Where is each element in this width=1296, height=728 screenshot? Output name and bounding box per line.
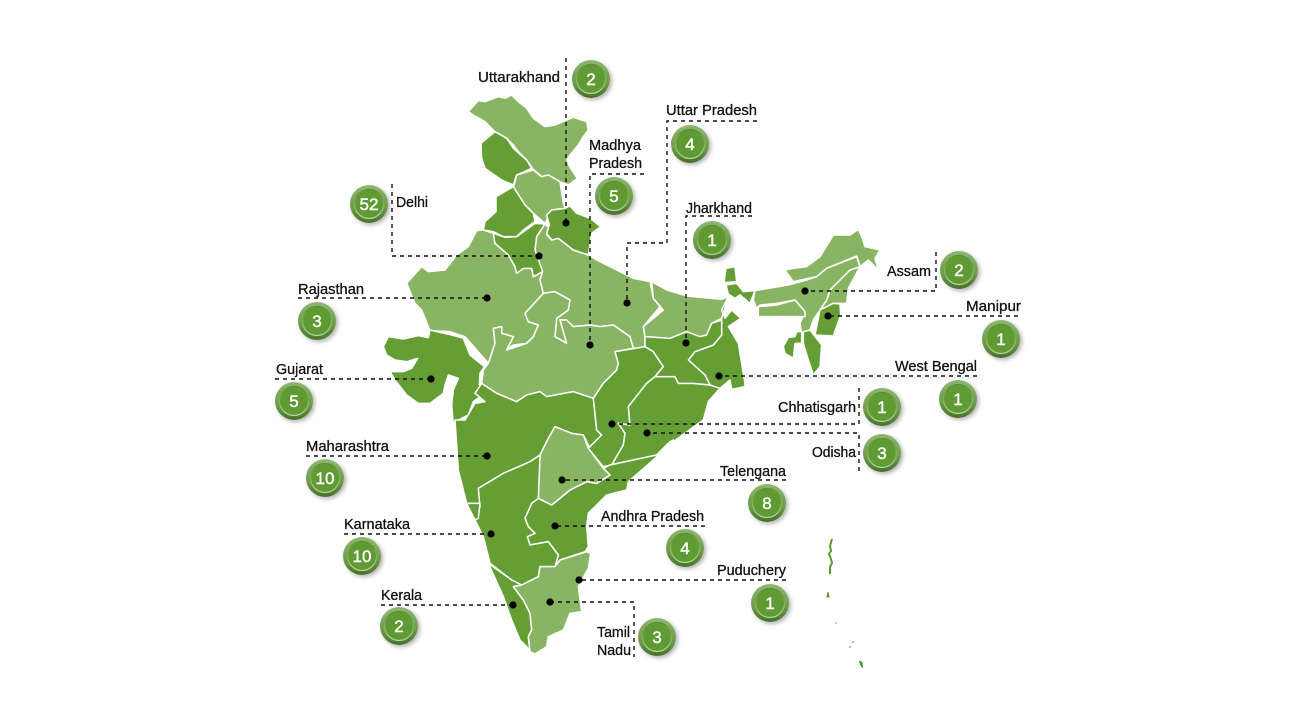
callout: West Bengal: West Bengal <box>895 358 977 375</box>
Maharashtra <box>455 383 602 503</box>
Manipur <box>815 303 841 336</box>
callout: Jharkhand: 1 <box>707 231 717 250</box>
callout: Assam <box>801 251 978 295</box>
north Bengal strip <box>726 283 755 303</box>
callout: Assam: Assam <box>887 263 931 280</box>
callout: Odisha <box>643 429 901 472</box>
callout: Delhi <box>350 184 543 260</box>
callout: Tamil Nadu: Nadu <box>597 642 631 659</box>
callout: Rajasthan <box>298 281 491 340</box>
Ladakh and Kashmir <box>468 95 588 185</box>
callout: Madhya Pradesh: Madhya <box>589 137 642 154</box>
Sikkim <box>724 267 737 283</box>
callout: West Bengal <box>715 358 977 418</box>
callout: Assam: 2 <box>954 261 964 280</box>
callout: Madhya Pradesh: 5 <box>609 187 619 206</box>
northern and central states <box>407 95 660 402</box>
callout: Telengana: Telengana <box>720 463 787 480</box>
callout: Tamil Nadu <box>546 598 676 659</box>
callout: Andhra Pradesh: 4 <box>680 539 690 558</box>
callout: Kerala: 2 <box>394 617 404 636</box>
Telangana <box>538 427 610 505</box>
callout: Uttarakhand <box>478 58 610 227</box>
callout: Rajasthan: Rajasthan <box>298 281 364 298</box>
callout: Maharashtra: 10 <box>316 469 334 488</box>
Chhattisgarh <box>588 347 663 467</box>
callout: Karnataka: Karnataka <box>344 516 411 533</box>
callout: Gujarat: 5 <box>289 392 299 411</box>
Arunachal Pradesh <box>785 229 880 282</box>
callout: Manipur <box>824 298 1021 358</box>
callout: Andhra Pradesh <box>551 508 705 567</box>
callout: Manipur: 1 <box>996 330 1006 349</box>
callout: Karnataka: 10 <box>353 547 371 566</box>
Rajasthan <box>407 230 543 363</box>
Madhya Pradesh <box>482 292 633 402</box>
callout: Uttarakhand: Uttarakhand <box>478 69 560 86</box>
Himachal Pradesh <box>513 170 565 223</box>
callout: Jharkhand: Jharkhand <box>686 200 752 217</box>
callout: Jharkhand <box>682 200 752 347</box>
Meghalaya <box>758 300 805 317</box>
Tamil Nadu <box>513 552 591 654</box>
callout: Puduchery: Puduchery <box>717 562 786 579</box>
callout: Uttarakhand: 2 <box>586 70 596 89</box>
callout: Kerala: Kerala <box>381 587 423 604</box>
Andaman and Nicobar islands <box>827 539 863 668</box>
callout: Rajasthan: 3 <box>312 312 322 331</box>
Mizoram <box>803 330 822 375</box>
callout: Tamil Nadu: 3 <box>652 628 662 647</box>
callout: Odisha: 3 <box>877 444 887 463</box>
callout: Telengana <box>558 463 787 522</box>
callout: Puduchery <box>575 562 789 622</box>
Jharkhand <box>645 320 722 385</box>
map of India <box>383 95 880 668</box>
callout: Maharashtra <box>306 438 491 497</box>
callout: Telengana: 8 <box>762 494 772 513</box>
eastern and north-eastern states <box>643 229 880 389</box>
callout: Madhya Pradesh: Pradesh <box>589 155 642 172</box>
Kerala <box>488 563 532 650</box>
West Bengal <box>688 297 745 389</box>
western Jammu <box>481 132 532 185</box>
Assam <box>753 257 860 333</box>
callout: Gujarat <box>275 361 435 420</box>
callout: Gujarat: Gujarat <box>276 361 324 378</box>
callout: Madhya Pradesh <box>586 137 644 349</box>
callout: Chhatisgarh <box>608 388 901 428</box>
Bihar <box>643 282 728 338</box>
southern states <box>455 347 720 654</box>
Tripura <box>783 332 802 358</box>
Haryana and Delhi <box>493 223 545 277</box>
Odisha <box>610 377 720 465</box>
callout: Andhra Pradesh: Andhra Pradesh <box>601 508 704 525</box>
callout: Uttar Pradesh: 4 <box>685 135 695 154</box>
Andhra Pradesh <box>525 440 673 567</box>
callout: Karnataka <box>343 516 495 575</box>
Nagaland <box>820 267 860 310</box>
Karnataka <box>475 455 558 585</box>
callout: Odisha: Odisha <box>812 444 857 461</box>
Uttarakhand <box>547 206 601 255</box>
callout: Puduchery: 1 <box>765 594 775 613</box>
callout: Manipur: Manipur <box>966 298 1021 315</box>
callout: Tamil Nadu: Tamil <box>597 624 630 641</box>
callout: Uttar Pradesh: Uttar Pradesh <box>666 102 757 119</box>
callout: Maharashtra: Maharashtra <box>306 438 390 455</box>
callout: Delhi: 52 <box>360 195 378 214</box>
callout: Kerala <box>380 587 517 645</box>
Uttar Pradesh <box>535 224 660 348</box>
callout: Uttar Pradesh <box>623 102 757 307</box>
Goa <box>467 503 480 520</box>
callout: West Bengal: 1 <box>953 390 963 409</box>
callout: Chhatisgarh: Chhatisgarh <box>778 399 856 416</box>
Punjab <box>483 187 535 237</box>
Gujarat <box>383 330 485 425</box>
callout: Chhatisgarh: 1 <box>877 398 887 417</box>
callout: Delhi: Delhi <box>396 194 428 211</box>
